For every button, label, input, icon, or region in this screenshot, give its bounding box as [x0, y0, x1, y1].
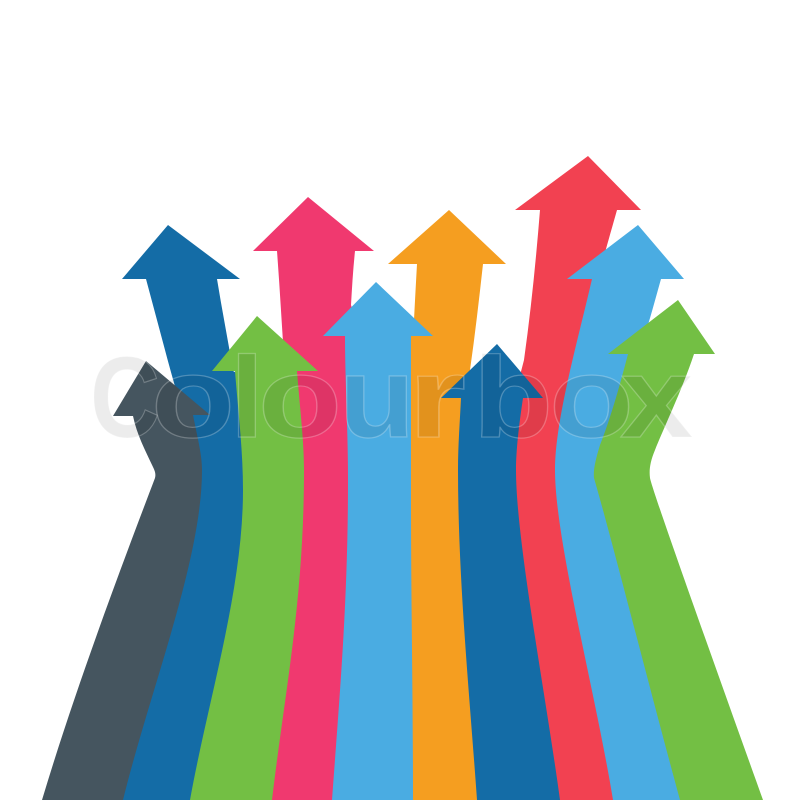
- watermark: Colourbox: x: [620, 334, 693, 462]
- arrow: red: [505, 156, 641, 800]
- arrow: orange: [388, 210, 506, 800]
- watermark: Colourbox: u: [339, 334, 415, 462]
- arrow: green left: [190, 316, 318, 800]
- arrow: pink: [253, 197, 374, 800]
- arrow: light blue center: [323, 282, 433, 800]
- arrow: green right: [594, 300, 763, 800]
- watermark: Colourbox: r: [408, 334, 466, 462]
- watermark: Colourbox: o: [151, 334, 235, 462]
- arrow: dark gray: [42, 361, 210, 800]
- arrow: dark blue center: [441, 344, 560, 800]
- watermark: Colourbox: o: [549, 334, 634, 462]
- arrow: light blue right: [555, 225, 695, 800]
- watermark: Colourbox: o: [258, 334, 342, 462]
- watermark: Colourbox: [90, 334, 693, 462]
- watermark: Colourbox: C: [90, 334, 160, 462]
- arrow: dark blue left: [110, 225, 252, 800]
- watermark: Colourbox: b: [473, 334, 553, 462]
- watermark: Colourbox: l: [230, 334, 264, 462]
